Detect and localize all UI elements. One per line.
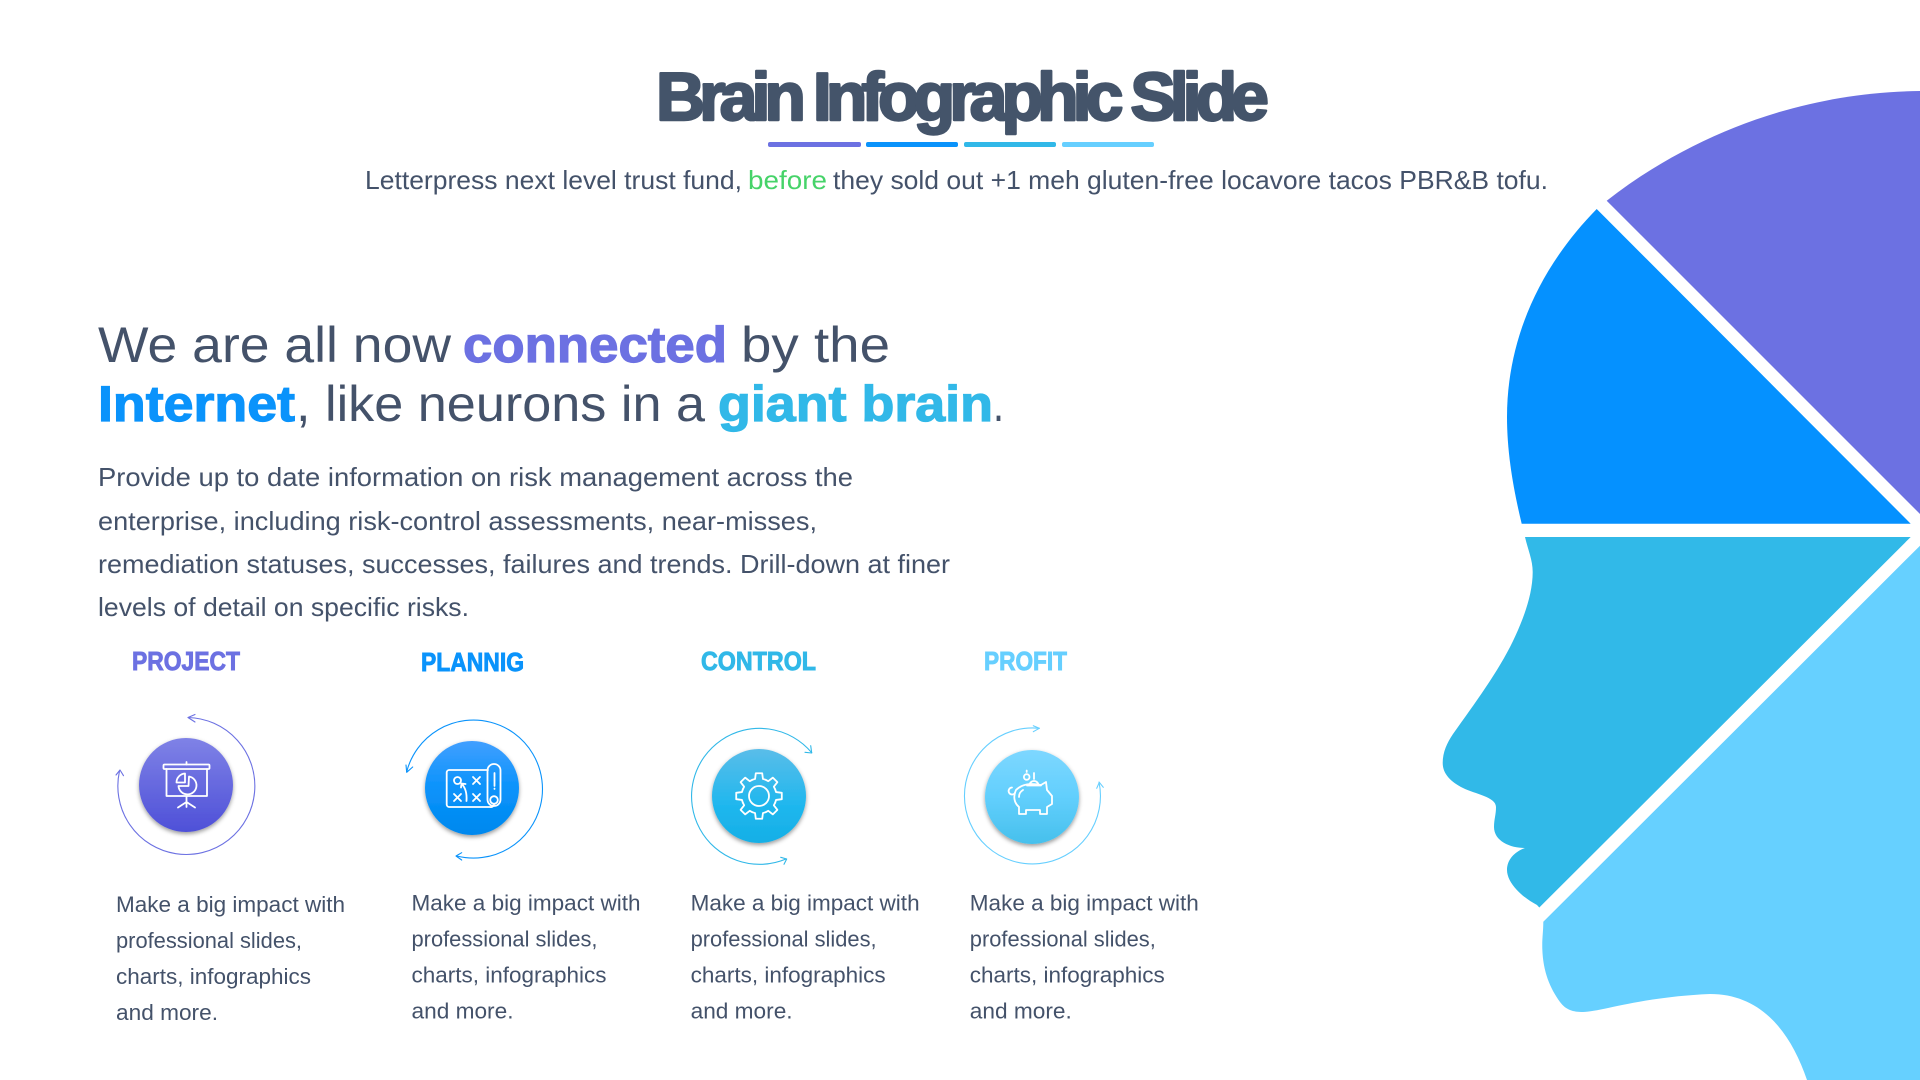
head segment: cyan face <box>1443 537 1911 908</box>
description: profit: and more. <box>970 998 1072 1024</box>
description: control: charts, infographics <box>691 962 886 988</box>
ring arrow: profit <box>964 726 1103 864</box>
panel: profit <box>964 646 1199 1024</box>
panel: control <box>691 646 920 1024</box>
description: control <box>691 890 920 1024</box>
description: profit: charts, infographics <box>970 962 1165 988</box>
description: project: charts, infographics <box>116 964 311 989</box>
description: control: professional slides, <box>691 926 877 952</box>
description: profit: professional slides, <box>970 926 1156 952</box>
description: project: professional slides, <box>116 928 302 953</box>
description: profit <box>970 890 1199 1024</box>
ring arrow: control <box>692 728 812 864</box>
icon disc: control <box>712 749 806 843</box>
body paragraph: levels of detail on specific risks. <box>98 592 469 622</box>
label: control: CONTROL <box>701 646 816 676</box>
title underline bars <box>768 142 1154 147</box>
heading: , like neurons in a <box>296 376 705 432</box>
label: profit: PROFIT <box>984 646 1067 676</box>
description: project <box>116 892 345 1025</box>
description: project: and more. <box>116 1000 218 1025</box>
head segment: blue forehead <box>1507 209 1911 524</box>
description: control: Make a big impact with <box>691 890 920 916</box>
ring arrow: project <box>116 714 255 854</box>
subtitle <box>365 165 1548 195</box>
head segment: purple crown <box>1607 91 1920 514</box>
icon disc: project <box>139 738 233 832</box>
label: plannig: PLANNIG <box>421 647 524 677</box>
description: planning <box>412 890 640 1024</box>
icon disc: profit <box>985 750 1079 844</box>
label: project: PROJECT <box>132 646 240 676</box>
heading: connected <box>463 317 727 373</box>
head segment: light blue jaw and neck <box>1542 546 1920 1080</box>
body paragraph: Provide up to date information on risk management across the <box>98 462 853 492</box>
heading: giant brain <box>718 376 993 432</box>
title: Brain Infographic Slide <box>656 59 1269 135</box>
heading <box>98 317 1004 432</box>
icon: presentation board <box>164 762 210 808</box>
description: profit: Make a big impact with <box>970 890 1199 916</box>
subtitle: Letterpress next level trust fund, <box>365 165 742 195</box>
description: planning: professional slides, <box>412 926 598 952</box>
panel: project <box>116 646 345 1025</box>
head silhouette <box>1443 91 1920 1080</box>
heading: Internet <box>98 376 295 432</box>
heading: . <box>993 376 1004 432</box>
icon: gear <box>736 773 782 819</box>
ring arrow: planning <box>406 720 542 860</box>
description: planning: charts, infographics <box>412 962 606 988</box>
icon: piggy bank <box>1009 770 1052 814</box>
description: project: Make a big impact with <box>116 892 345 917</box>
body paragraph <box>98 462 950 622</box>
subtitle: they sold out +1 meh gluten-free locavore tacos PBR&B tofu. <box>833 165 1548 195</box>
subtitle: before <box>748 165 827 195</box>
icon disc: planning <box>425 741 519 835</box>
description: planning: Make a big impact with <box>412 890 640 916</box>
panel: planning <box>406 647 640 1024</box>
body paragraph: remediation statuses, successes, failures and trends. Drill-down at finer <box>98 549 950 579</box>
heading: We are all now <box>98 317 452 373</box>
heading: by the <box>741 317 890 373</box>
body paragraph: enterprise, including risk-control assessments, near-misses, <box>98 506 817 536</box>
icon: strategy map <box>447 764 500 807</box>
description: planning: and more. <box>412 998 514 1024</box>
description: control: and more. <box>691 998 793 1024</box>
